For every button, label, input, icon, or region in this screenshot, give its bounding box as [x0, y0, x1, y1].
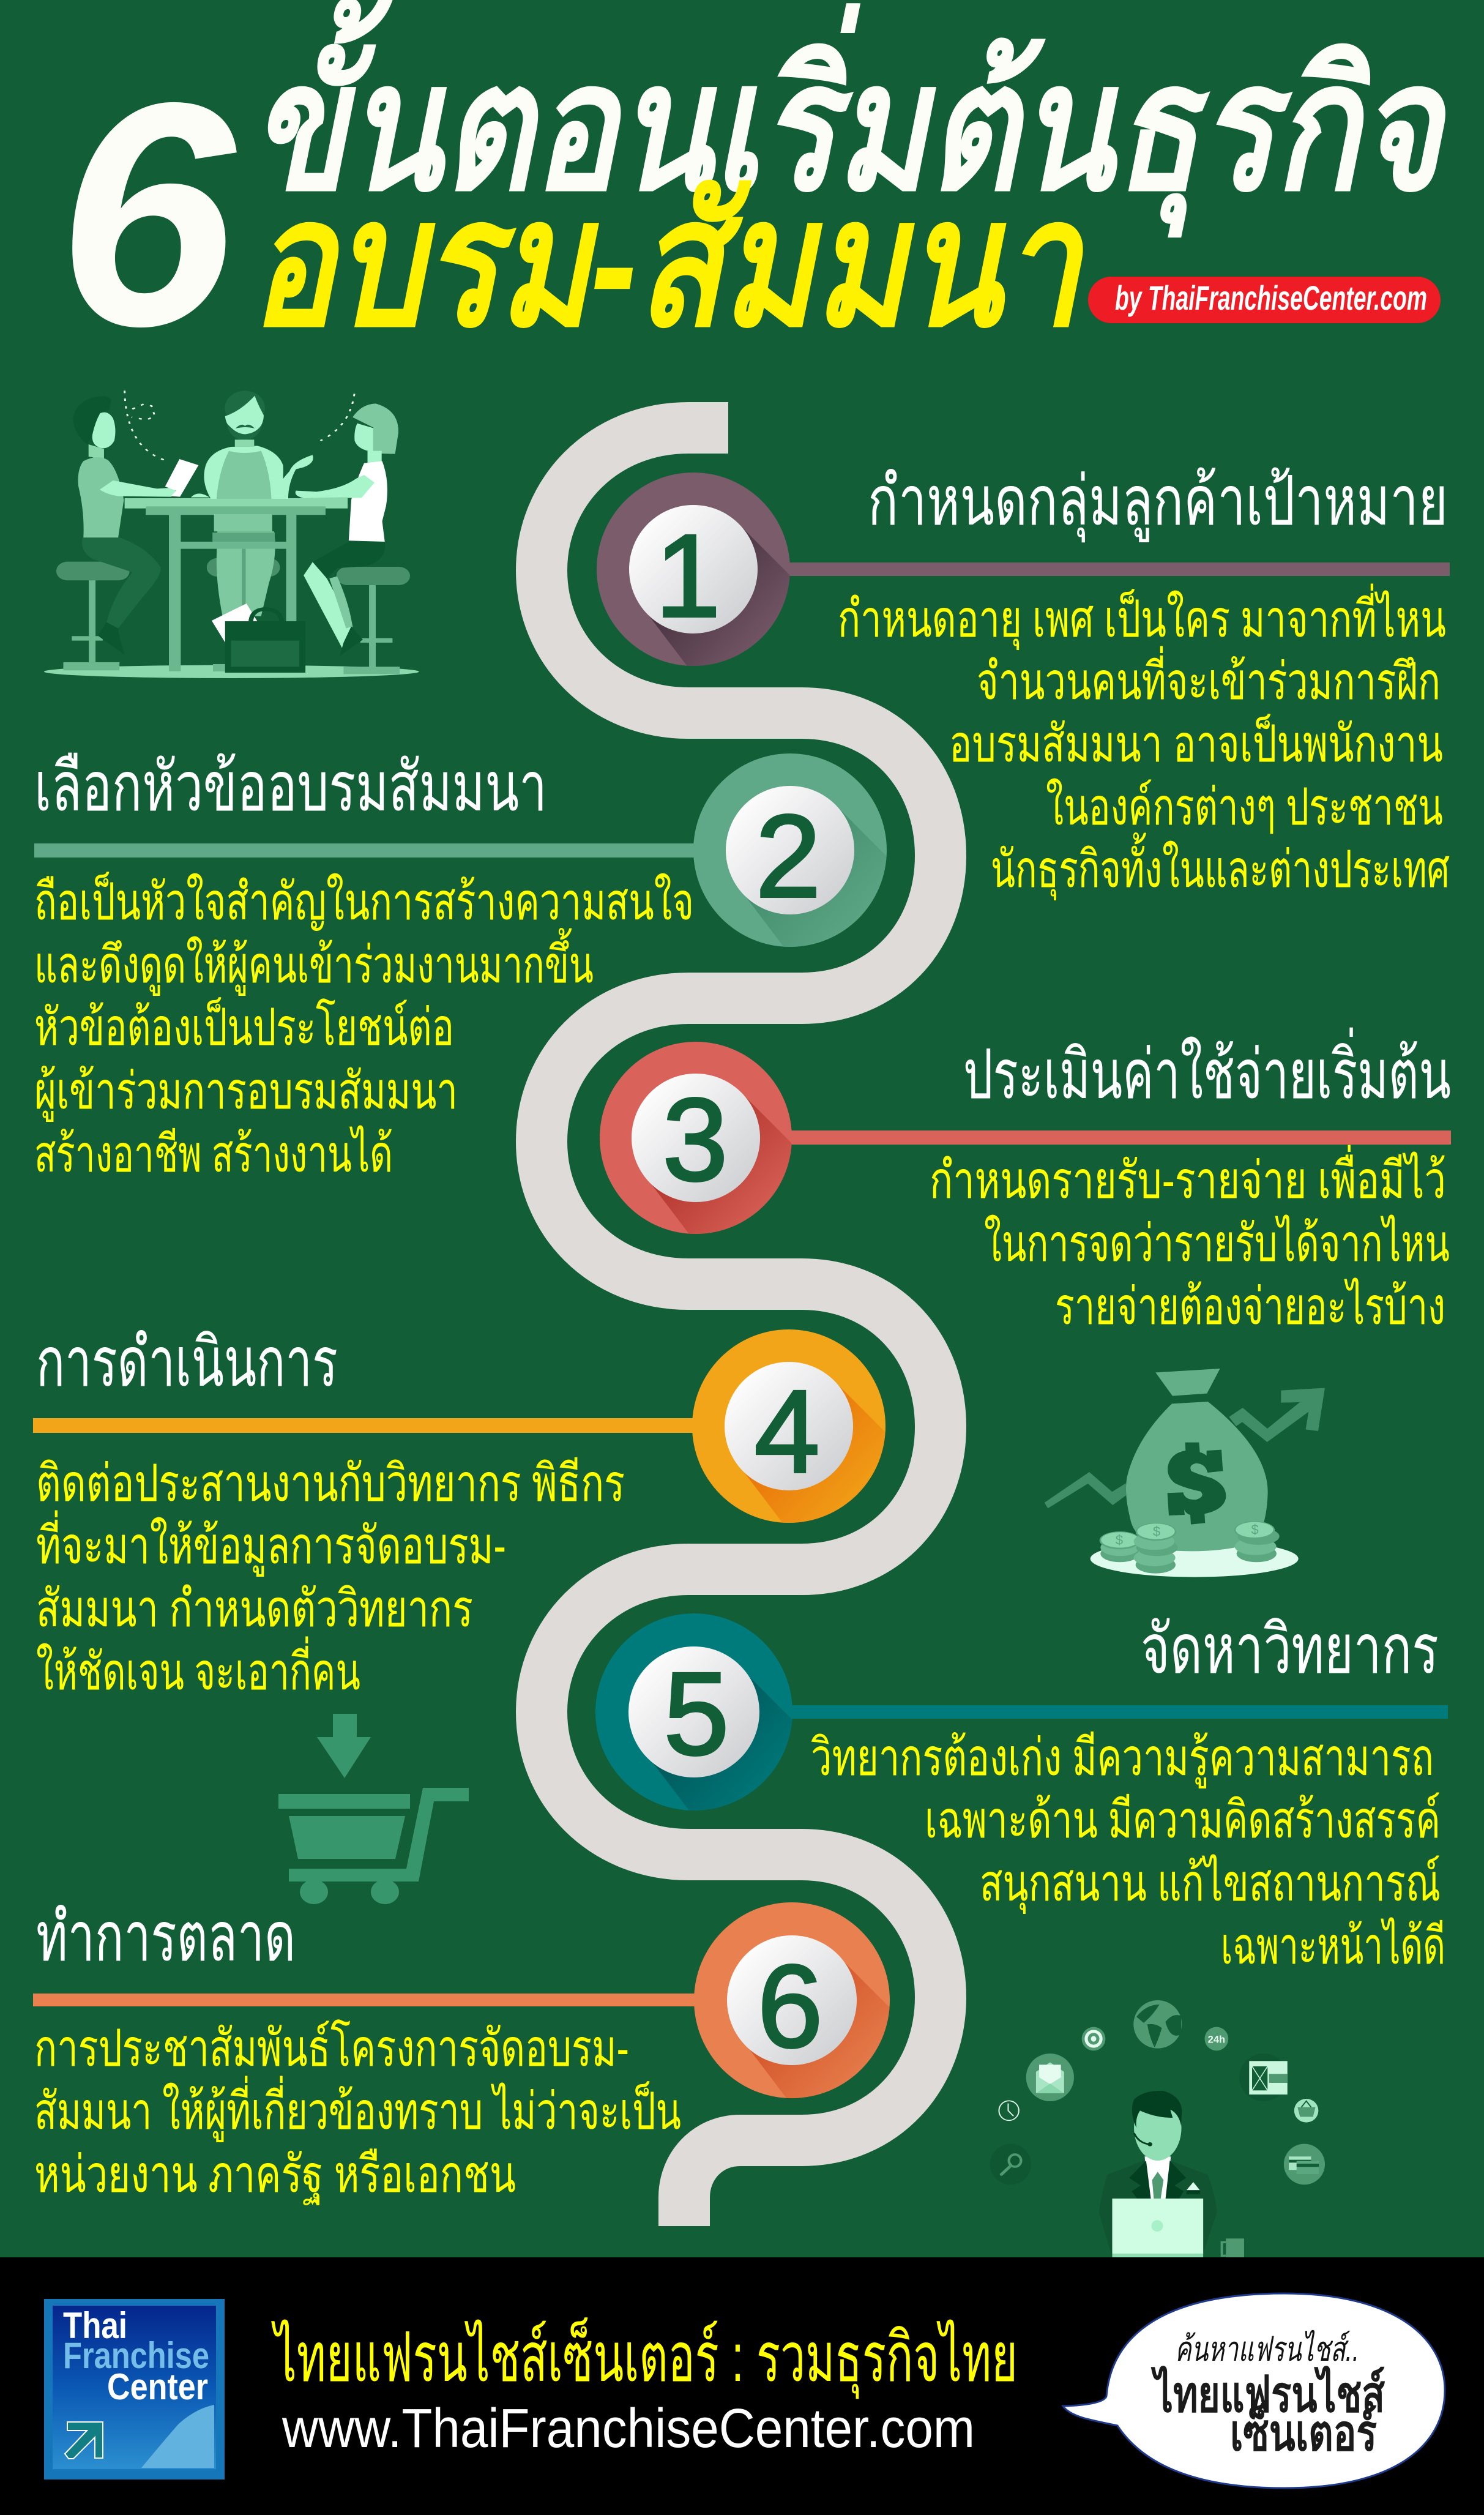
body 2: ผู้เข้าร่วมการอบรมสัมมนา	[34, 1062, 458, 1122]
badge 6	[694, 1902, 890, 2098]
target icon	[1082, 2027, 1105, 2050]
illustration: team meeting at table	[44, 391, 419, 678]
badge 5	[595, 1613, 792, 1811]
footer band	[0, 2257, 1484, 2515]
title line 2: อบรม-สัมมนา	[251, 164, 1087, 362]
body 3	[930, 1145, 1450, 1335]
step 2	[34, 749, 935, 1183]
table	[125, 498, 348, 671]
badge 2	[694, 753, 887, 947]
body 4: ให้ชัดเจน จะเอากี่คน	[36, 1636, 360, 1700]
speech bubble: ไทยแฟรนไชส์	[1150, 2366, 1385, 2423]
footer tagline (Thai): ไทยแฟรนไชส์เซ็นเตอร์ : รวมธุรกิจไทย	[271, 2317, 1018, 2399]
badge 6: 6	[758, 1940, 822, 2072]
big numeral 6: 6	[58, 37, 237, 392]
coin stacks	[1100, 1521, 1280, 1574]
basket icon	[1294, 2099, 1318, 2123]
coin stacks: $	[1251, 1522, 1259, 1538]
footer logo	[44, 2299, 225, 2479]
clock icon	[999, 2101, 1019, 2120]
badge 1	[597, 473, 790, 666]
speech bubble: ค้นหาแฟรนไชส์..	[1175, 2330, 1359, 2368]
footer website: www.ThaiFranchiseCenter.com	[282, 2398, 975, 2459]
footer logo: Franchise	[63, 2335, 209, 2376]
credit card icon	[1284, 2144, 1325, 2184]
heading 4: การดำเนินการ	[36, 1324, 338, 1400]
body 2	[34, 872, 694, 1183]
badge 4: 4	[755, 1366, 819, 1497]
24h icon	[1205, 2027, 1228, 2050]
speech dots	[125, 391, 354, 460]
briefcase	[212, 604, 305, 673]
badge 3: 3	[663, 1074, 728, 1205]
connector bar 1	[786, 562, 1450, 576]
coin stacks: $	[1116, 1532, 1123, 1547]
illustration: customer-support agent with floating icons	[990, 2000, 1325, 2257]
connector bar 6	[33, 1994, 698, 2006]
heading 6: ทำการตลาด	[36, 1899, 296, 1975]
badge 3	[600, 1042, 792, 1234]
badge 5: 5	[664, 1648, 729, 1779]
body 4: ที่จะมาให้ข้อมูลการจัดอบรม-	[36, 1510, 506, 1577]
search icon	[990, 2144, 1031, 2184]
speech bubble: เซ็นเตอร์	[1230, 2402, 1377, 2461]
step 4	[33, 1324, 934, 1700]
footer logo: Center	[107, 2366, 208, 2407]
body 2: ถือเป็นหัวใจสำคัญในการสร้างความสนใจ	[34, 872, 694, 932]
step 3	[600, 1027, 1451, 1335]
red byline pill	[1088, 277, 1441, 323]
web layout icon	[1239, 2053, 1288, 2101]
step 6	[33, 1899, 937, 2205]
body 6: หน่วยงาน ภาครัฐ หรือเอกชน	[34, 2145, 516, 2205]
agent figure	[1099, 2091, 1244, 2257]
body 2: สร้างอาชีพ สร้างงานได้	[34, 1125, 393, 1183]
body 5	[811, 1728, 1445, 1975]
badge 1: 1	[655, 510, 720, 641]
connector bar 2	[34, 843, 698, 858]
badge 4	[692, 1329, 886, 1523]
step 5	[595, 1611, 1448, 1975]
footer logo: Thai	[63, 2305, 127, 2346]
connector bar 5	[788, 1705, 1448, 1719]
step 1	[597, 463, 1450, 901]
speech bubble	[1063, 2293, 1445, 2488]
body 4: ติดต่อประสานงานกับวิทยากร พิธีกร	[36, 1454, 625, 1512]
body 4: สัมมนา กำหนดตัววิทยากร	[36, 1580, 473, 1637]
connector bar 4	[33, 1418, 697, 1433]
body 1	[838, 583, 1450, 901]
illustration: money bag with rising arrow	[1045, 1369, 1325, 1577]
icon: shopping cart with down arrow	[278, 1714, 469, 1904]
connector bar 3	[788, 1130, 1451, 1145]
badge 2: 2	[756, 790, 821, 922]
body 2: และดึงดูดให้ผู้คนเข้าร่วมงานมากขึ้น	[34, 928, 594, 996]
body 6	[34, 2019, 681, 2205]
heading 2: เลือกหัวข้ออบรมสัมมนา	[34, 749, 547, 825]
globe icon	[1133, 2000, 1182, 2049]
body 2: หัวข้อต้องเป็นประโยชน์ต่อ	[34, 997, 454, 1056]
body 6: การประชาสัมพันธ์โครงการจัดอบรม-	[34, 2019, 629, 2077]
24h icon: 24h	[1208, 2033, 1225, 2045]
body 6: สัมมนา ให้ผู้ที่เกี่ยวข้องทราบ ไม่ว่าจะเป็น	[34, 2076, 681, 2142]
title block	[58, 0, 1449, 392]
coin stacks: $	[1153, 1523, 1160, 1539]
body 4	[36, 1454, 625, 1700]
mail icon	[1026, 2053, 1074, 2101]
serpentine road	[542, 428, 941, 2226]
